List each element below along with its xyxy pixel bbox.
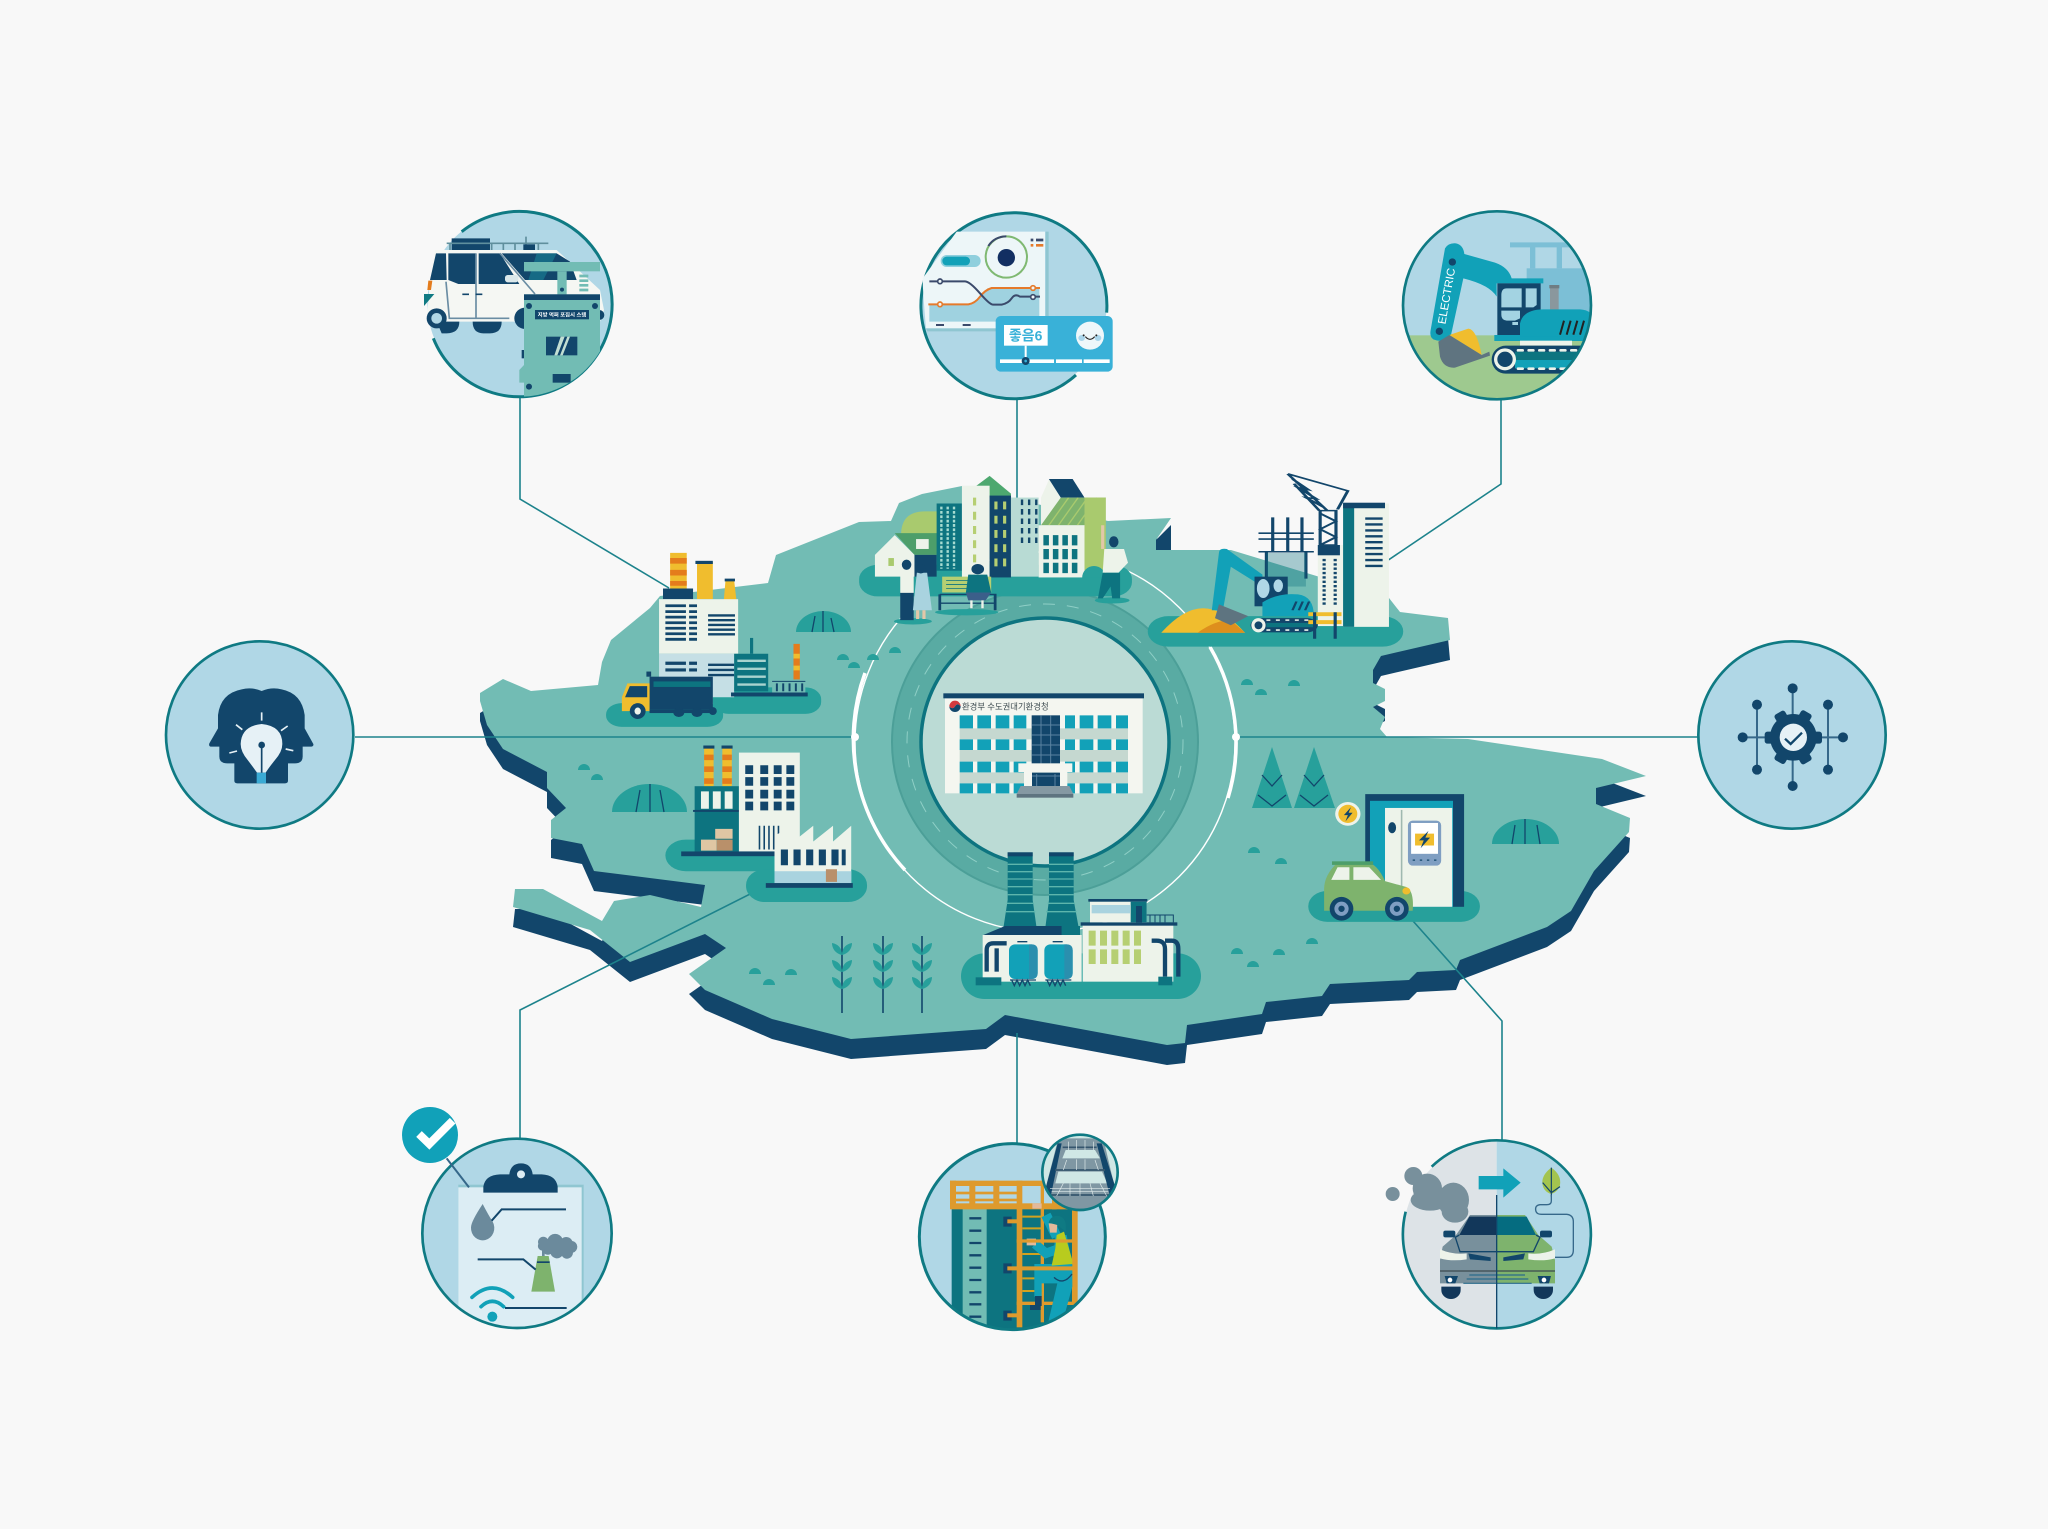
panel: inspection of stack equipment <box>919 1135 1120 1332</box>
map land surface <box>480 486 1646 1045</box>
air quality card <box>996 316 1113 372</box>
circle background <box>919 1144 1105 1330</box>
worker climbing the ladder <box>1027 1203 1072 1332</box>
stack tower and worker <box>950 1181 1078 1332</box>
pine trees <box>1252 747 1335 808</box>
wheat plants <box>832 936 932 1013</box>
icon: gear with network nodes <box>1738 683 1848 791</box>
circle outline <box>1403 211 1591 399</box>
circle background <box>422 1139 612 1328</box>
panel: emissions checklist <box>402 1107 612 1331</box>
icon: air monitoring station: 지방 먹퍼 포집시 스템 <box>538 311 586 319</box>
circle background <box>427 211 613 396</box>
scene: EV charger and electric car <box>1308 794 1480 922</box>
circle <box>166 641 353 829</box>
dome bushes <box>612 611 1559 844</box>
circle outline <box>921 213 1107 399</box>
cooling towers <box>1003 852 1080 935</box>
ministry emblem <box>949 701 961 712</box>
air quality card: 좋음6 <box>1009 328 1043 344</box>
plant base <box>961 953 1201 999</box>
circular road ring <box>892 589 1198 895</box>
plant pipes <box>987 941 1178 977</box>
clipboard <box>458 1163 584 1331</box>
map of the metropolitan region <box>480 486 1646 1065</box>
arrow <box>1479 1168 1521 1198</box>
panel: electric excavator <box>1400 207 1602 405</box>
central glass tower <box>1032 715 1060 765</box>
building grey bands <box>960 728 1128 783</box>
circle outline <box>433 211 612 397</box>
scene: factories <box>665 745 867 902</box>
panel: air quality dashboard <box>921 211 1113 399</box>
icon: two heads with lightbulb <box>209 688 313 783</box>
notch shadow <box>1156 525 1171 552</box>
icon: excavator <box>1430 243 1602 374</box>
plant left block <box>983 935 1082 982</box>
connector lines <box>355 396 1698 1144</box>
icon: excavator: ELECTRIC <box>1436 267 1458 325</box>
inset: inside the stack grid <box>1040 1135 1120 1210</box>
circle outline <box>1403 1140 1591 1328</box>
scene: industrial complex with truck <box>606 553 821 727</box>
infographic canvas <box>164 210 1887 1332</box>
exhaust smoke <box>1386 1167 1469 1223</box>
scene: city and residents <box>859 476 1132 624</box>
circle outline <box>919 1144 1105 1330</box>
circle <box>1698 641 1886 829</box>
white orbit ring <box>851 552 1240 932</box>
panel: integrated management network <box>1698 641 1886 829</box>
building sign: 환경부 수도권대기환경청 <box>962 702 1049 712</box>
entrance portico <box>1017 763 1073 798</box>
circle outline <box>422 1139 612 1328</box>
dashboard screen <box>923 232 1049 331</box>
building scenes on the map <box>606 474 1480 922</box>
icon: air monitoring station <box>519 262 600 401</box>
grass tufts <box>578 647 1318 985</box>
cyan windows <box>960 715 1128 793</box>
panel: mobile air monitoring van <box>424 211 613 401</box>
scene: construction site with electric excavator <box>1148 474 1403 647</box>
storage tanks <box>1009 942 1073 986</box>
central building scene <box>943 693 1144 798</box>
circle background <box>921 211 1107 397</box>
check badge <box>402 1107 469 1187</box>
building roof bar <box>943 693 1144 698</box>
circle background split grey and blue <box>1400 1138 1597 1332</box>
icon: van <box>424 237 604 333</box>
plant green windows <box>1089 931 1141 964</box>
plant right block <box>1083 925 1173 982</box>
circle background and scenery <box>1404 212 1590 398</box>
panel: collaboration idea <box>166 641 353 829</box>
icon: leaf with power cord <box>1536 1168 1573 1257</box>
map depth shadow <box>480 506 1646 1065</box>
power plant scene <box>961 852 1201 999</box>
icon: car half polluting half green <box>1440 1195 1555 1328</box>
government building body <box>945 698 1143 793</box>
panel: vehicle conversion to eco-friendly <box>1386 1138 1597 1332</box>
